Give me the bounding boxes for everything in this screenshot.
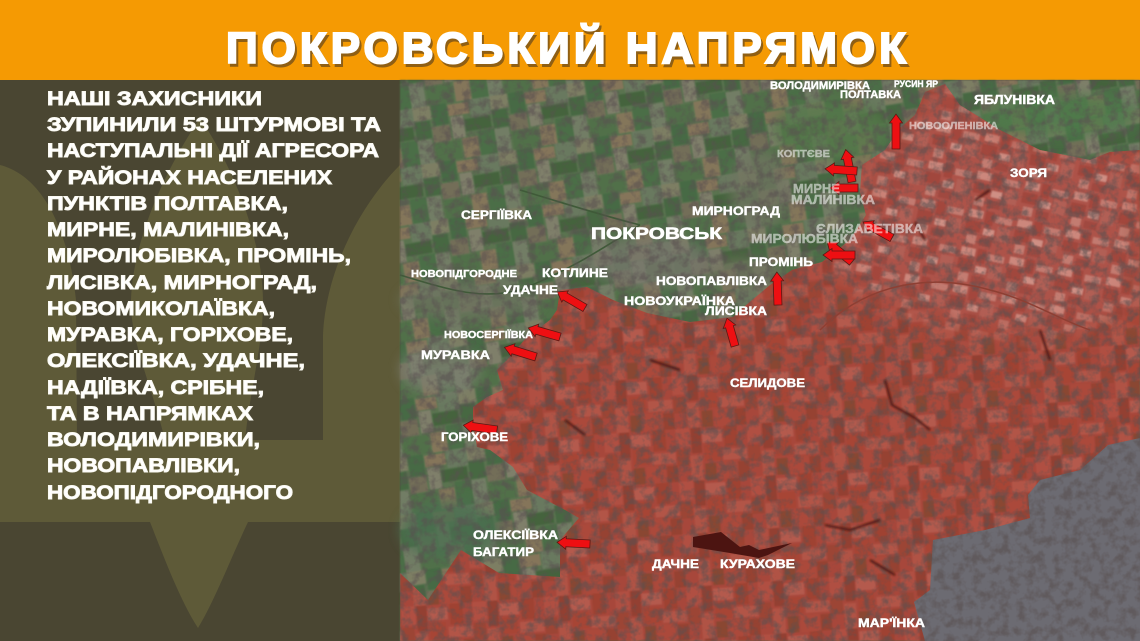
arrow: Muravka xyxy=(503,341,538,363)
arrow: Promin xyxy=(770,272,784,305)
place labels: МАЛИНІВКА xyxy=(791,192,876,207)
place labels: НОВОУКРАЇНКА xyxy=(624,293,735,308)
arrow: Yelyzavetivka xyxy=(860,216,895,244)
place labels: ВОЛОДИМИРІВКА xyxy=(770,80,870,92)
place labels: ДАЧНЕ xyxy=(652,557,699,571)
grey eastern zone xyxy=(914,438,1140,641)
arrow: Novosergiivka xyxy=(526,322,562,343)
summary text block: МИРНЕ, МАЛИНІВКА, xyxy=(47,219,289,241)
reservoir xyxy=(693,532,792,558)
summary text block: МУРАВКА, ГОРІХОВЕ, xyxy=(47,324,293,346)
summary text block: НОВОМИКОЛАЇВКА, xyxy=(47,297,275,320)
arrow: Udachne xyxy=(554,286,588,314)
place labels: КОПТЄВЕ xyxy=(777,148,830,160)
summary text block: НОВОПАВЛІВКИ, xyxy=(47,455,240,477)
place labels: ОЛЕКСІЇВКА xyxy=(473,527,558,542)
title shadow: ПОКРОВСЬКИЙ НАПРЯМОК xyxy=(228,25,908,76)
urban areas xyxy=(400,93,1140,560)
place labels: ГОРІХОВЕ xyxy=(441,430,508,444)
place labels: БАГАТИР xyxy=(473,545,534,559)
summary text block: НАСТУПАЛЬНІ ДІЇ АГРЕСОРА xyxy=(47,139,379,162)
place labels: НОВОПАВЛІВКА xyxy=(656,274,767,288)
summary text block: У РАЙОНАХ НАСЕЛЕНИХ xyxy=(47,165,332,189)
place labels xyxy=(411,79,1055,630)
arrow: Poltavka xyxy=(890,114,902,149)
place labels: МАР'ЇНКА xyxy=(858,615,925,630)
summary text block: НАШІ ЗАХИСНИКИ xyxy=(47,88,262,110)
place labels: УДАЧНЕ xyxy=(503,285,558,297)
place labels: ПРОМІНЬ xyxy=(749,255,813,269)
arrow: Myroliubivka west xyxy=(823,248,855,262)
place labels: КУРАХОВЕ xyxy=(720,557,795,571)
gullies xyxy=(565,190,1050,575)
place labels: НОВООЛЕНІВКА xyxy=(909,120,998,132)
summary text block: ТА В НАПРЯМКАХ xyxy=(47,403,253,425)
occupied territory xyxy=(400,80,1140,641)
place labels: ЛИСІВКА xyxy=(705,304,767,318)
summary text block xyxy=(47,88,381,504)
place labels: ЄЛИЗАВЕТІВКА xyxy=(816,221,924,236)
road xyxy=(400,190,640,294)
place labels: МУРАВКА xyxy=(421,348,490,362)
summary text block: ЗУПИНИЛИ 53 ШТУРМОВІ ТА xyxy=(47,114,381,136)
summary text block: НОВОПІДГОРОДНОГО xyxy=(47,482,293,504)
place labels: МИРОЛЮБІВКА xyxy=(751,231,859,246)
place labels: РУСИН ЯР xyxy=(894,79,938,89)
place labels: ПОКРОВСЬК xyxy=(591,224,723,243)
summary text block: ОЛЕКСІЇВКА, УДАЧНЕ, xyxy=(47,349,305,372)
summary text block: ЛИСІВКА, МИРНОГРАД, xyxy=(47,272,317,294)
place labels: ЯБЛУНІВКА xyxy=(974,93,1055,107)
summary text block: НАДІЇВКА, СРІБНЕ, xyxy=(47,376,264,399)
place labels: НОВОПІДГОРОДНЕ xyxy=(411,269,517,280)
title: ПОКРОВСЬКИЙ НАПРЯМОК xyxy=(226,22,906,73)
place labels: СЕЛИДОВЕ xyxy=(730,376,805,390)
arrow: Lysivka xyxy=(721,316,741,348)
arrow: Koptieve west xyxy=(825,162,857,177)
place labels: НОВОСЕРГІЇВКА xyxy=(444,328,533,341)
place labels: ЗОРЯ xyxy=(1010,166,1047,180)
summary text block: ПУНКТІВ ПОЛТАВКА, xyxy=(47,193,288,215)
pink upper fields xyxy=(822,86,1140,348)
map texture xyxy=(400,80,1140,641)
arrow: Myroliubivka diagonal xyxy=(823,237,856,267)
arrows xyxy=(462,114,902,550)
arrow: Koptieve north xyxy=(839,148,858,183)
arrow: Oleksiivka xyxy=(557,536,590,550)
satellite map xyxy=(400,80,1140,641)
title bar xyxy=(0,0,1140,80)
place labels: МИРНЕ xyxy=(793,181,840,196)
summary text block: МИРОЛЮБІВКА, ПРОМІНЬ, xyxy=(47,245,351,267)
arrow: Horikhove xyxy=(462,419,498,436)
place labels: СЕРГІЇВКА xyxy=(461,209,532,222)
place labels: КОТЛИНЕ xyxy=(542,266,608,280)
panel: summary text xyxy=(0,80,400,641)
summary text block: ВОЛОДИМИРІВКИ, xyxy=(47,429,260,451)
place labels: ПОЛТАВКА xyxy=(840,89,901,101)
trident emblem xyxy=(0,118,400,628)
arrow: Myrne xyxy=(830,182,858,194)
place labels: МИРНОГРАД xyxy=(692,204,781,218)
